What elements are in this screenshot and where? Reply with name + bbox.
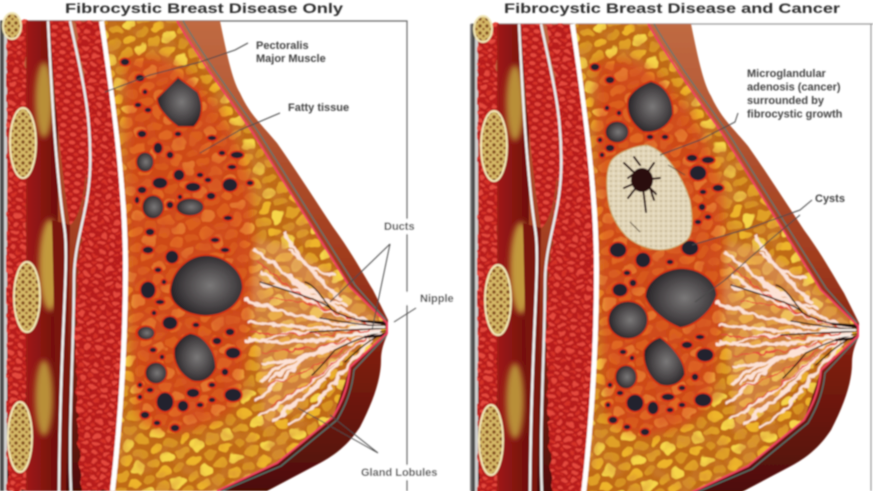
label: microglandular adenosis: fibrocystic growth [747, 108, 843, 120]
panel: fibrocystic breast disease and cancer [470, 0, 873, 491]
panel: fibrocystic breast disease only [0, 0, 456, 491]
label: nipple [402, 292, 456, 305]
panel frame [471, 24, 873, 491]
panel frame [0, 21, 407, 491]
label: fatty tissue: Fatty tissue [288, 102, 349, 114]
title: left panel: Fibrocystic Breast Disease Only [65, 0, 343, 16]
label: microglandular adenosis: surrounded by [747, 95, 825, 107]
label: ducts [382, 219, 420, 234]
leader lines [660, 113, 812, 302]
leader lines [105, 43, 416, 453]
small cysts [590, 63, 724, 436]
label: ducts: Ducts [384, 221, 415, 233]
tumor: microglandular adenosis [607, 145, 692, 250]
large cysts [136, 77, 243, 384]
illustration: breast cross-section [0, 10, 410, 491]
label: nipple: Nipple [420, 293, 454, 305]
left edge line [470, 24, 472, 491]
label: microglandular adenosis: adenosis (cancer) [747, 82, 841, 94]
label: gland lobules: Gland Lobules [361, 467, 437, 479]
label: microglandular adenosis: Microglandular [747, 68, 827, 80]
label: pectoralis major muscle: Major Muscle [256, 53, 326, 65]
illustration: breast cross-section [471, 13, 873, 491]
label: cysts: Cysts [815, 193, 845, 205]
label: pectoralis major muscle: Pectoralis [256, 40, 309, 52]
title: right panel: Fibrocystic Breast Disease and Cancer [504, 0, 841, 16]
small cysts [120, 58, 254, 432]
large cysts [605, 81, 717, 389]
